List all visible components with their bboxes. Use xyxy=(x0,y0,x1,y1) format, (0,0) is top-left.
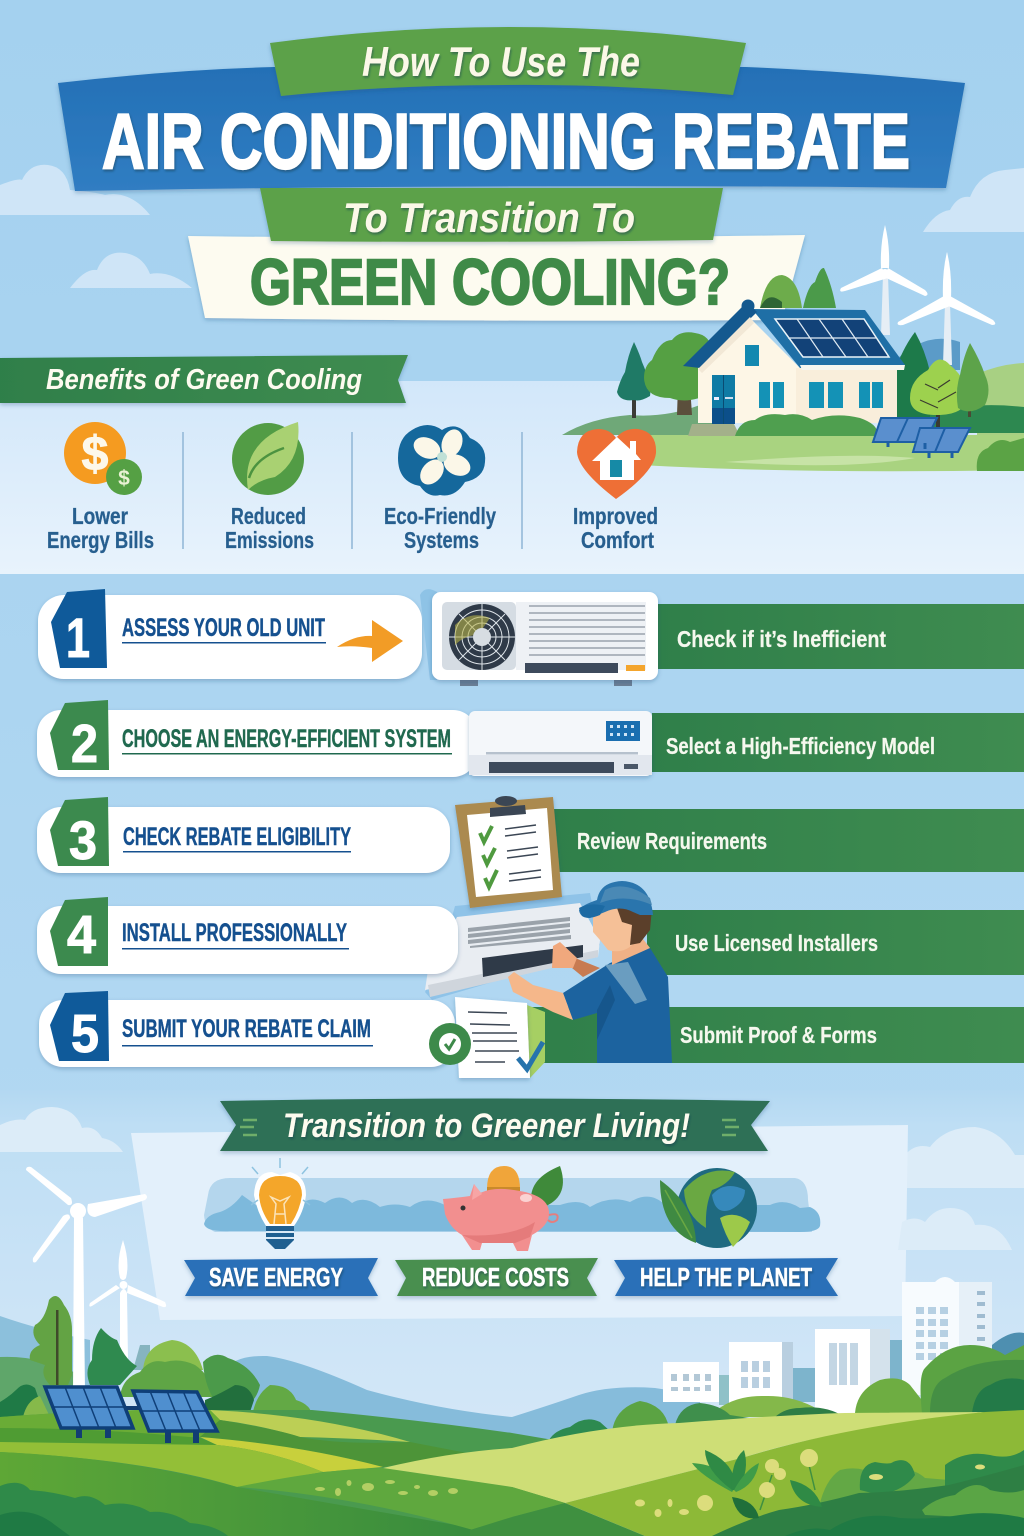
icon: lightbulb xyxy=(251,1158,310,1249)
tree: teal xyxy=(617,342,650,418)
right bushes xyxy=(549,1345,1024,1440)
panel: greener living xyxy=(131,1125,908,1320)
title line 1: How To Use The xyxy=(362,38,640,85)
benefit: improved comfort: Comfort xyxy=(581,527,654,553)
icon: globe with leaves xyxy=(660,1168,757,1248)
benefits banner: Benefits of Green Cooling xyxy=(46,364,362,396)
bottom bushes xyxy=(0,1450,1024,1536)
action label 4: Use Licensed Installers xyxy=(675,930,878,956)
ribbon: reduce costs: REDUCE COSTS xyxy=(422,1262,569,1292)
step 4 xyxy=(37,893,1024,1000)
step 1 xyxy=(38,589,1024,686)
action label 1: Check if it’s Inefficient xyxy=(677,626,886,652)
step 4: INSTALL PROFESSIONALLY xyxy=(122,919,347,947)
clouds: upper xyxy=(0,165,1024,288)
bottom banner xyxy=(220,1098,770,1151)
step 3 xyxy=(37,797,1024,873)
title line 4: GREEN COOLING? xyxy=(250,246,730,318)
AC outdoor unit xyxy=(420,589,658,686)
step 1: 1 xyxy=(66,606,90,669)
benefit: lower energy bills: $ xyxy=(82,428,109,481)
cloud over panel edge xyxy=(898,1208,1012,1250)
benefit: reduced emissions: Reduced xyxy=(231,503,306,529)
step 3: 3 xyxy=(69,811,97,871)
icon: rebate document xyxy=(429,997,545,1078)
AC being installed xyxy=(425,893,600,1000)
ribbon: reduce costs xyxy=(395,1258,598,1296)
step 2: CHOOSE AN ENERGY-EFFICIENT SYSTEM xyxy=(122,725,451,753)
title banner: blue xyxy=(58,67,965,191)
ribbon: help the planet xyxy=(614,1258,838,1296)
icon: clipboard xyxy=(455,796,562,908)
solar panels: house xyxy=(873,418,970,458)
action label 3: Review Requirements xyxy=(577,828,767,854)
distant hills xyxy=(0,1316,1024,1450)
panel: benefits background xyxy=(0,381,1024,574)
benefit: lower energy bills: Lower xyxy=(72,503,128,529)
step 5: SUBMIT YOUR REBATE CLAIM xyxy=(122,1015,371,1043)
benefit: eco-friendly systems: Systems xyxy=(404,527,479,553)
hills xyxy=(0,1410,565,1536)
left trees and bushes xyxy=(0,1296,312,1417)
step 2: 2 xyxy=(71,714,98,774)
decorative blue band xyxy=(204,1178,820,1232)
benefits banner xyxy=(0,355,408,403)
step 4: 4 xyxy=(67,905,96,965)
benefit: reduced emissions: Emissions xyxy=(225,527,314,553)
benefit: eco-friendly systems: Eco-Friendly xyxy=(384,503,496,529)
benefit: lower energy bills: Energy Bills xyxy=(47,527,154,553)
solar panels: landscape xyxy=(45,1387,217,1443)
title ribbon: lower green xyxy=(260,188,723,242)
icon: worker xyxy=(508,881,672,1063)
step 5: 5 xyxy=(71,1004,99,1064)
house body xyxy=(683,300,905,436)
wind turbines xyxy=(26,1167,166,1392)
benefit: eco-friendly systems xyxy=(384,425,496,553)
benefit: improved comfort xyxy=(573,429,658,553)
tree: round green xyxy=(644,332,712,415)
ribbon: help the planet: HELP THE PLANET xyxy=(640,1262,812,1292)
icon: piggy bank xyxy=(443,1166,563,1251)
plant and flowers xyxy=(692,1450,822,1519)
benefit: reduced emissions xyxy=(225,422,314,553)
tree: lime xyxy=(910,360,967,427)
clouds: lower xyxy=(0,1107,1024,1250)
ribbon: save energy xyxy=(184,1258,378,1296)
step 2 xyxy=(37,700,1024,777)
title ribbon: top green xyxy=(270,27,746,96)
scene: house with solar panels xyxy=(562,225,1024,471)
step 5 xyxy=(39,991,1024,1067)
benefit: improved comfort: Improved xyxy=(573,503,658,529)
action label 2: Select a High-Efficiency Model xyxy=(666,733,935,759)
AC indoor unit xyxy=(469,711,652,776)
benefit: lower energy bills: $ xyxy=(118,467,130,490)
ribbon: save energy: SAVE ENERGY xyxy=(209,1262,343,1292)
title panel: cream xyxy=(188,235,805,321)
step 3: CHECK REBATE ELIGIBILITY xyxy=(123,823,351,851)
buildings xyxy=(663,1277,992,1415)
step 1: ASSESS YOUR OLD UNIT xyxy=(122,614,325,642)
title line 3: To Transition To xyxy=(343,194,635,241)
wind turbines xyxy=(840,225,995,365)
bottom banner: Transition to Greener Living! xyxy=(283,1107,690,1145)
landscape xyxy=(0,1167,1024,1536)
action label 5: Submit Proof & Forms xyxy=(680,1022,877,1048)
benefit: lower energy bills xyxy=(47,422,154,553)
